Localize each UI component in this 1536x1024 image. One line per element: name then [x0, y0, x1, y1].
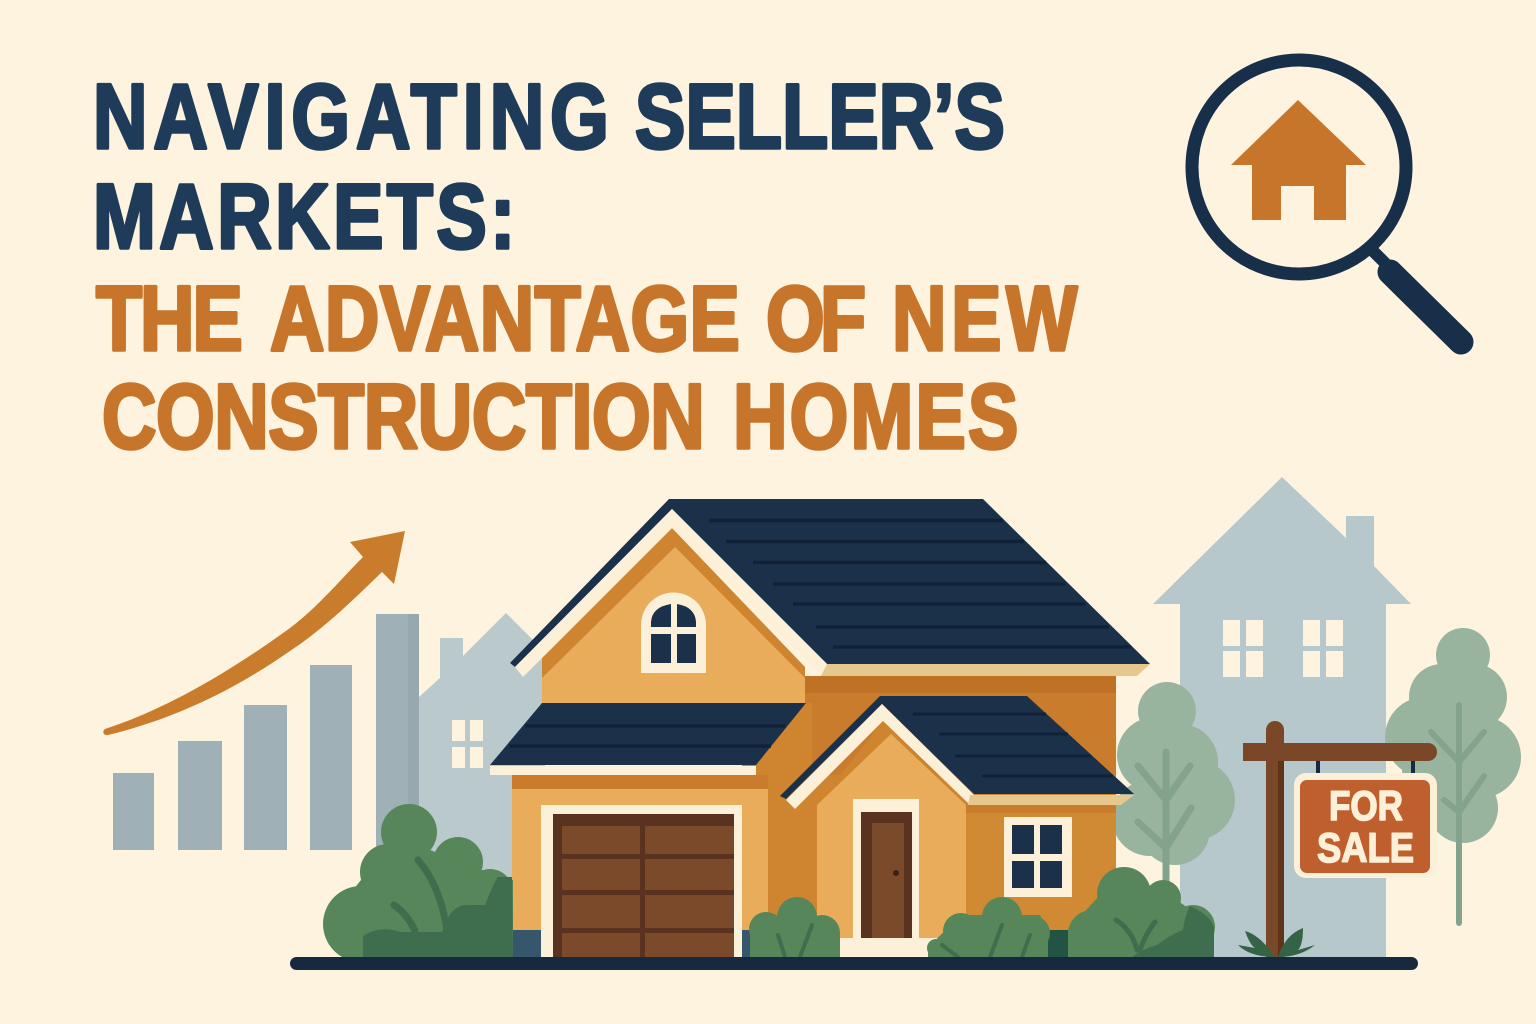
house: [490, 499, 1150, 957]
title line: navy: SELLER’S: [635, 65, 1005, 168]
sign post: [1266, 721, 1284, 957]
tree: right: [1385, 628, 1521, 923]
sign text: [1317, 782, 1414, 871]
title line: navy: MARKETS:: [93, 165, 515, 268]
front door: [833, 799, 929, 957]
title: [93, 65, 1078, 468]
title line: navy: NAVIGATING: [93, 65, 609, 168]
title line: orange: CONSTRUCTION: [102, 365, 705, 468]
title line: orange: THE: [96, 267, 243, 370]
title line: orange: [96, 267, 1078, 468]
sign board: [1294, 773, 1437, 878]
side window: [1004, 817, 1072, 897]
front gable wall: [817, 721, 966, 938]
background house: large right: [1153, 477, 1411, 957]
shrub: right of door: [927, 897, 1050, 957]
icon: magnifying glass with house: [1192, 60, 1461, 342]
title line: navy: [93, 65, 1005, 268]
main body wall: [805, 676, 1116, 930]
attic window: [641, 592, 706, 673]
title line: orange: HOMES: [733, 365, 1018, 468]
ground line: [290, 957, 1418, 970]
tree: left: [1112, 682, 1235, 882]
title line: orange: NEW: [892, 267, 1078, 370]
sign text: SALE: [1317, 824, 1414, 871]
shrub: center: [749, 897, 840, 957]
upper gable wall: [542, 528, 805, 703]
background house: small left: [419, 613, 545, 880]
main roof: [510, 499, 1150, 667]
shrub: right: [1068, 867, 1215, 958]
title line: orange: ADVANTAGE: [270, 267, 740, 370]
roof trim: [515, 509, 827, 677]
shrub: large left: [323, 804, 513, 962]
bar chart: [113, 614, 419, 854]
lower left roof: [490, 703, 806, 765]
front roof trim: [786, 704, 974, 809]
right wall lower: [966, 805, 1116, 930]
front roof: [780, 696, 1134, 799]
sign text: FOR: [1329, 782, 1403, 829]
garage door: [541, 805, 742, 957]
arrow: rising trend: [103, 531, 405, 735]
title line: orange: OF: [766, 267, 866, 370]
grass: [1238, 928, 1315, 957]
garage wall: [512, 789, 768, 930]
for sale sign: [1238, 721, 1437, 957]
foundation: [512, 930, 752, 957]
